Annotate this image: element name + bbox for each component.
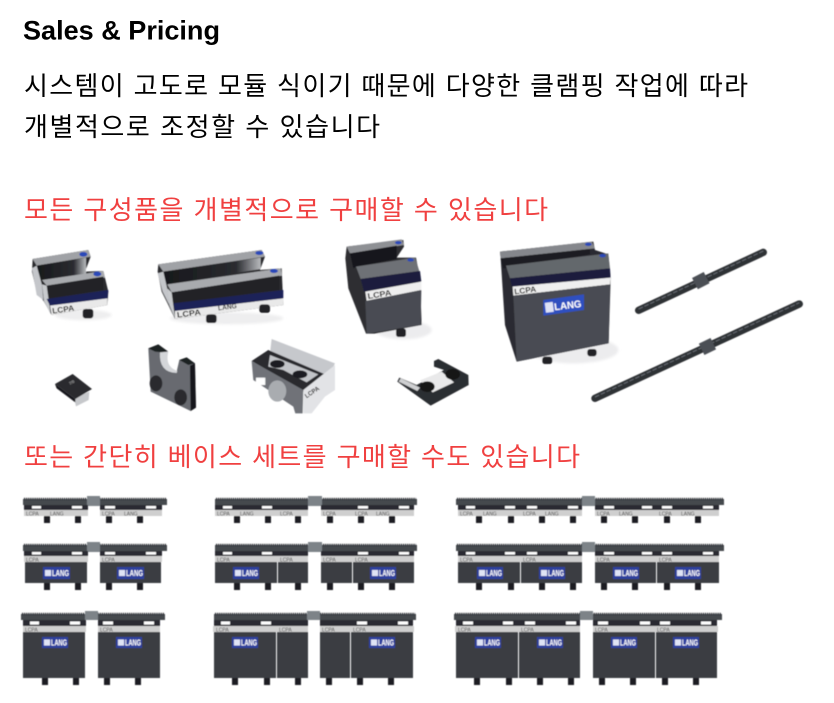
- base set: two modules, low: LANG: [50, 512, 64, 518]
- product: short vise on low base: LCPA: [52, 304, 75, 316]
- base set: two modules, low: LCPA: [102, 512, 115, 518]
- base set: four modules, medium: LCPA: [523, 558, 536, 564]
- base set: three-part modules, low: LCPA: [323, 512, 336, 518]
- base set: three-part modules, low: LCPA: [217, 512, 230, 518]
- base set: two modules, tall: LCPA: [100, 628, 113, 634]
- product: long threaded spindle: [595, 303, 799, 398]
- base set: three-part modules, medium: LCPA: [280, 558, 293, 564]
- base set: four modules, tall: LANG: [682, 638, 698, 648]
- product: small clamp piece: [55, 374, 92, 406]
- intro text: 개별적으로 조정할 수 있습니다: [24, 112, 380, 142]
- base set: three-part modules, low: LCPA: [355, 512, 368, 518]
- base set: four modules, low: LANG: [545, 512, 559, 518]
- product: machined jaw block: LCPA: [304, 385, 321, 400]
- base set: three-part modules, low: [215, 496, 417, 523]
- base set: three-part modules, tall: LCPA: [322, 628, 335, 634]
- base set: four modules, tall: [454, 611, 722, 685]
- base set: three-part modules, low: LANG: [376, 512, 390, 518]
- base set: two modules, medium: LANG: [52, 569, 69, 578]
- base set: two modules, tall: LANG: [51, 638, 67, 648]
- product: large vise on tall base: LCPA: [514, 285, 537, 296]
- base set: four modules, medium: LANG: [548, 569, 564, 578]
- base set: three-part modules, medium: [215, 542, 417, 590]
- base set: three-part modules, low: LANG: [240, 512, 254, 518]
- intro text: 시스템이 고도로 모듈 식이기 때문에 다양한 클램핑 작업에 따라: [24, 71, 748, 101]
- base set: two modules, tall: LANG: [125, 638, 141, 648]
- product: small clamp piece: 7/0: [68, 378, 76, 386]
- base set: two modules, medium: LANG: [126, 569, 143, 578]
- base set: two modules, low: [23, 496, 167, 523]
- product: short threaded spindle: [639, 251, 763, 310]
- product: long vise on low base: [158, 250, 283, 324]
- base set: four modules, low: LCPA: [659, 512, 672, 518]
- base set: four modules, tall: LANG: [620, 638, 636, 648]
- base set: four modules, medium: LCPA: [460, 558, 473, 564]
- base set: four modules, low: LCPA: [597, 512, 610, 518]
- product: slotted plate: [148, 344, 196, 411]
- base set: four modules, medium: LANG: [684, 569, 700, 578]
- base set: two modules, medium: [23, 542, 167, 590]
- heading: base sets: 또는 간단히 베이스 세트를 구매할 수도 있습니다: [24, 442, 580, 472]
- base set: four modules, low: LCPA: [523, 512, 536, 518]
- panel: individual component products: [32, 239, 799, 413]
- base set: three-part modules, tall: LCPA: [279, 628, 292, 634]
- base set: four modules, tall: LCPA: [657, 628, 670, 634]
- base set: three-part modules, tall: LANG: [241, 638, 257, 648]
- base set: two modules, medium: LCPA: [102, 558, 115, 564]
- base set: four modules, tall: LCPA: [458, 628, 471, 634]
- base set: four modules, tall: LCPA: [595, 628, 608, 634]
- base set: four modules, low: LANG: [619, 512, 633, 518]
- base set: two modules, medium: LCPA: [26, 558, 39, 564]
- base set: three-part modules, medium: LANG: [379, 569, 395, 578]
- base set: three-part modules, medium: LCPA: [217, 558, 230, 564]
- base set: four modules, medium: LANG: [622, 569, 638, 578]
- base set: three-part modules, medium: LANG: [242, 569, 258, 578]
- base set: two modules, low: LCPA: [26, 512, 39, 518]
- base set: four modules, medium: LANG: [486, 569, 502, 578]
- base set: three-part modules, medium: LCPA: [323, 558, 336, 564]
- base set: four modules, low: LANG: [681, 512, 695, 518]
- heading: individual components: 모든 구성품을 개별적으로 구매할 수 있습니다: [24, 195, 548, 225]
- product: U-shaped clamp piece: [397, 359, 469, 406]
- product: short vise on tall base: LCPA: [367, 288, 392, 301]
- base set: four modules, medium: LCPA: [659, 558, 672, 564]
- base set: two modules, tall: [21, 611, 165, 685]
- product: long vise on low base: LCPA: [176, 308, 202, 320]
- base set: four modules, tall: LCPA: [521, 628, 534, 634]
- product: large vise on tall base: [500, 242, 618, 364]
- base set: four modules, low: LCPA: [460, 512, 473, 518]
- base set: three-part modules, medium: LCPA: [355, 558, 368, 564]
- intro text: [24, 71, 748, 142]
- base set: four modules, tall: LANG: [484, 638, 500, 648]
- base set: four modules, medium: [456, 542, 724, 590]
- base set: two modules, tall: LCPA: [25, 628, 38, 634]
- product: large vise on tall base: LANG: [554, 299, 582, 313]
- base set: four modules, medium: LCPA: [597, 558, 610, 564]
- base set: three-part modules, tall: LANG: [378, 638, 394, 648]
- base set: four modules, tall: LANG: [546, 638, 562, 648]
- product: machined jaw block: [252, 339, 335, 413]
- base set: three-part modules, tall: [213, 611, 416, 685]
- base set: three-part modules, low: LCPA: [280, 512, 293, 518]
- base set: three-part modules, tall: LCPA: [353, 628, 366, 634]
- panel: base set grid: [21, 496, 724, 685]
- product: long vise on low base: LANG: [218, 303, 237, 312]
- product: short vise on tall base: [345, 239, 432, 339]
- base set: three-part modules, tall: LCPA: [216, 628, 229, 634]
- base set: four modules, low: [456, 496, 724, 523]
- product: short vise on low base: [32, 250, 112, 320]
- base set: four modules, low: LANG: [483, 512, 497, 518]
- base set: two modules, low: LANG: [124, 512, 138, 518]
- title: Sales & Pricing: [23, 16, 220, 46]
